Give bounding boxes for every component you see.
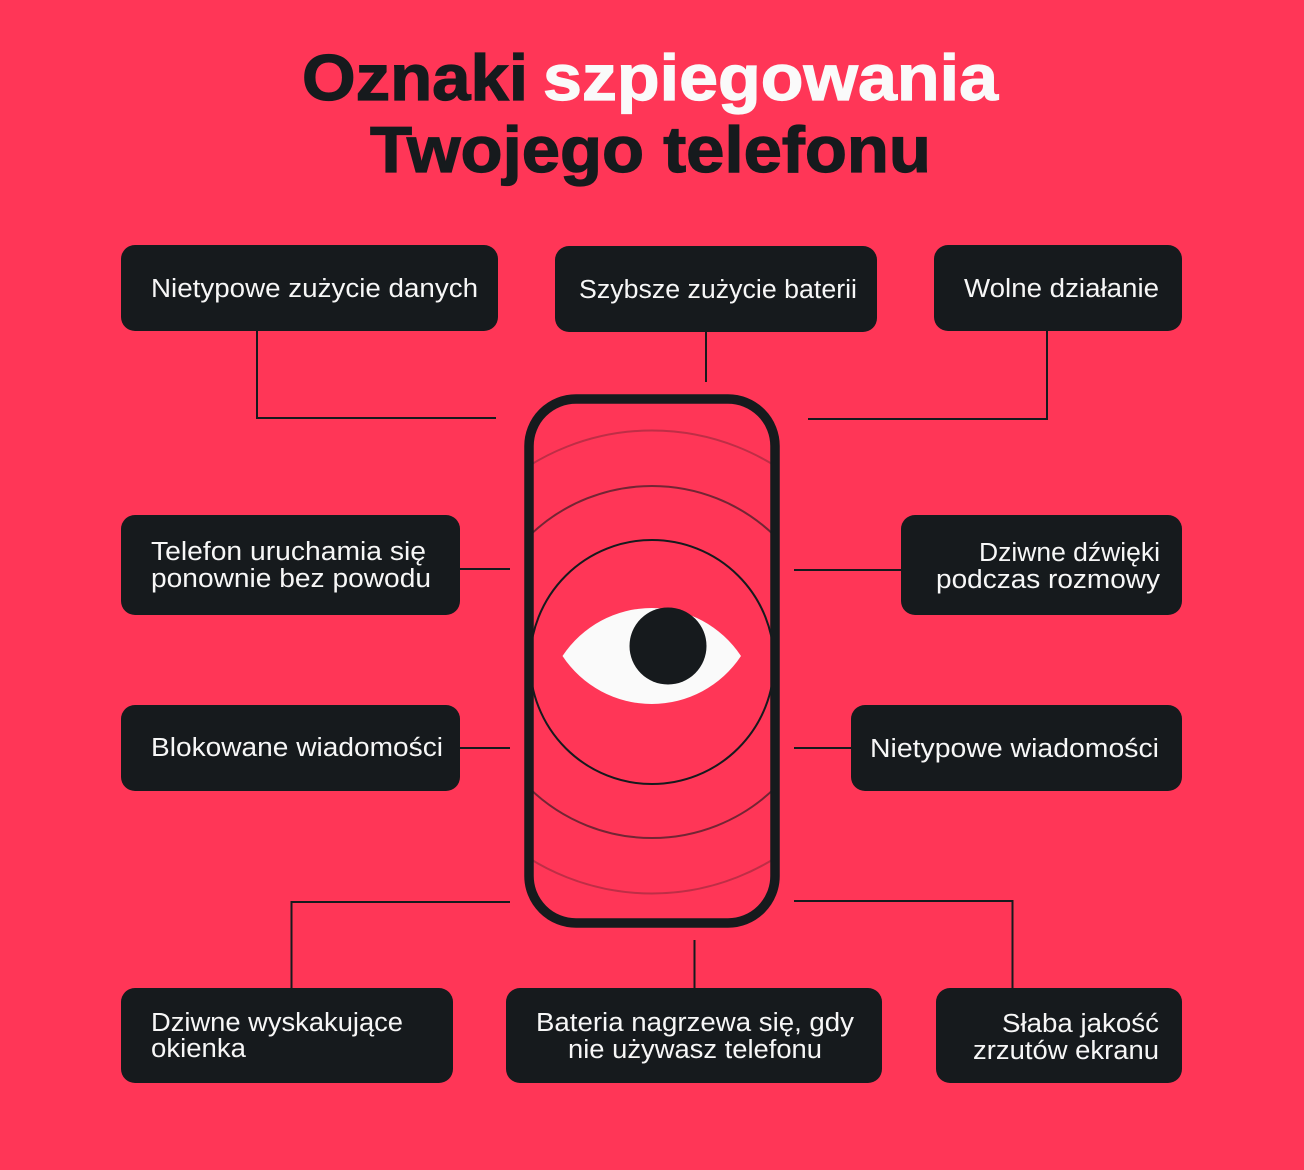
title: Oznaki xyxy=(302,41,528,114)
phone frame xyxy=(529,399,775,923)
connector: screenshots xyxy=(794,901,1012,988)
panel: restarts without reason: Telefon uruchamia się xyxy=(151,538,426,566)
panel: restarts without reason xyxy=(121,515,460,615)
connector: unusual data usage xyxy=(257,331,496,418)
title xyxy=(302,41,999,186)
panel: blocked messages: Blokowane wiadomości xyxy=(151,734,443,762)
panel: slow performance xyxy=(934,245,1182,331)
connector: battery heating xyxy=(694,940,696,988)
icon: eye xyxy=(562,608,741,704)
panel: battery heats up: Bateria nagrzewa się, gdy xyxy=(536,1009,854,1037)
panel: unusual messages: Nietypowe wiadomości xyxy=(870,735,1159,763)
connector: faster battery drain xyxy=(705,332,707,382)
title: szpiegowania xyxy=(543,41,999,114)
panel: strange pop-ups xyxy=(121,988,453,1083)
connector: unusual messages xyxy=(794,747,851,749)
panel: unusual messages xyxy=(851,705,1182,791)
panel: faster battery drain xyxy=(555,246,877,332)
panel: poor screenshots: Słaba jakość xyxy=(1002,1010,1159,1038)
panel: blocked messages xyxy=(121,705,460,791)
panel: battery heats up: nie używasz telefonu xyxy=(568,1036,822,1064)
connector: pop-ups xyxy=(292,902,510,988)
panel: strange pop-ups: okienka xyxy=(151,1035,247,1063)
panel: strange sounds during calls xyxy=(901,515,1182,615)
panel: battery heats up xyxy=(506,988,882,1083)
connector: restarts xyxy=(460,568,510,570)
connector: strange sounds xyxy=(794,569,901,571)
panel: poor screenshots: zrzutów ekranu xyxy=(973,1037,1159,1065)
panel: unusual data usage: Nietypowe zużycie danych xyxy=(151,275,478,303)
panel: slow performance: Wolne działanie xyxy=(964,275,1159,303)
panel: strange sounds during calls: Dziwne dźwięki xyxy=(979,539,1160,567)
panel: faster battery drain: Szybsze zużycie baterii xyxy=(579,276,857,304)
connector: blocked messages xyxy=(460,747,510,749)
panel: restarts without reason: ponownie bez powodu xyxy=(151,565,431,593)
panel: unusual data usage xyxy=(121,245,498,331)
panel: strange sounds during calls: podczas rozmowy xyxy=(936,566,1160,594)
panel: strange pop-ups: Dziwne wyskakujące xyxy=(151,1009,403,1037)
signal rings xyxy=(534,430,770,894)
phone with eye xyxy=(524,394,780,928)
connector: slow performance xyxy=(808,331,1047,419)
panel: poor screenshots xyxy=(936,988,1182,1083)
title: Twojego telefonu xyxy=(370,113,931,186)
